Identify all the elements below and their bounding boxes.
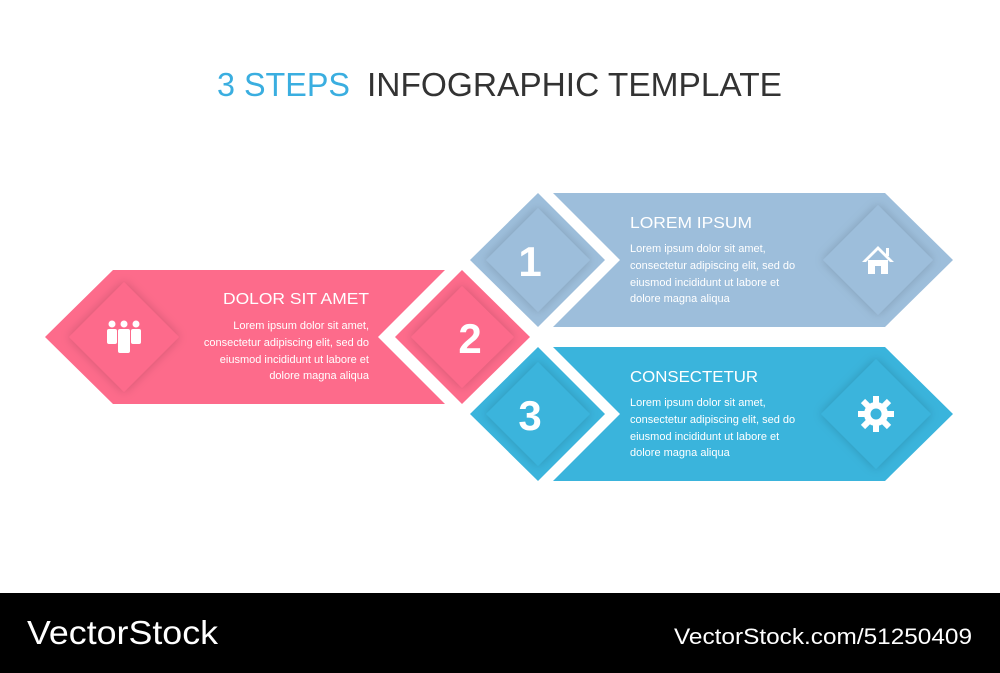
- icon: gear: [858, 396, 894, 432]
- band 1: dolore magna aliqua: [630, 293, 731, 305]
- icon: house: [862, 246, 894, 274]
- panel: step 2: [45, 270, 530, 404]
- band 1: LOREM IPSUM: [630, 215, 752, 232]
- band 3: eiusmod incididunt ut labore et: [630, 431, 779, 443]
- band 1: Lorem ipsum dolor sit amet,: [630, 243, 766, 255]
- footer bar: [0, 593, 1000, 673]
- title: 3 STEPS: [217, 66, 350, 103]
- number diamond 2: 2: [458, 315, 482, 362]
- band 2: DOLOR SIT AMET: [223, 291, 369, 308]
- number diamond 3: [470, 347, 605, 481]
- band 1: eiusmod incididunt ut labore et: [630, 277, 779, 289]
- number diamond 3: 3: [518, 392, 542, 439]
- title: INFOGRAPHIC TEMPLATE: [367, 66, 782, 103]
- footer bar: VectorStock: [27, 614, 219, 651]
- band 1: [553, 193, 953, 327]
- band 2: [45, 270, 445, 404]
- number diamond 1: 1: [518, 238, 542, 285]
- band 2: dolore magna aliqua: [269, 370, 370, 382]
- band 1: consectetur adipiscing elit, sed do: [630, 260, 795, 272]
- panel: step 1: [470, 193, 953, 327]
- number diamond 2: [395, 270, 530, 404]
- footer bar: VectorStock.com/51250409: [674, 624, 972, 649]
- band 3: consectetur adipiscing elit, sed do: [630, 414, 795, 426]
- band 2: Lorem ipsum dolor sit amet,: [233, 320, 369, 332]
- number diamond 1: [470, 193, 605, 327]
- band 3: CONSECTETUR: [630, 369, 758, 386]
- band 2: consectetur adipiscing elit, sed do: [204, 337, 369, 349]
- band 3: Lorem ipsum dolor sit amet,: [630, 397, 766, 409]
- band 3: [553, 347, 953, 481]
- band 3: dolore magna aliqua: [630, 447, 731, 459]
- panel: step 3: [470, 347, 953, 481]
- icon: people: [107, 320, 141, 353]
- band 2: eiusmod incididunt ut labore et: [220, 354, 369, 366]
